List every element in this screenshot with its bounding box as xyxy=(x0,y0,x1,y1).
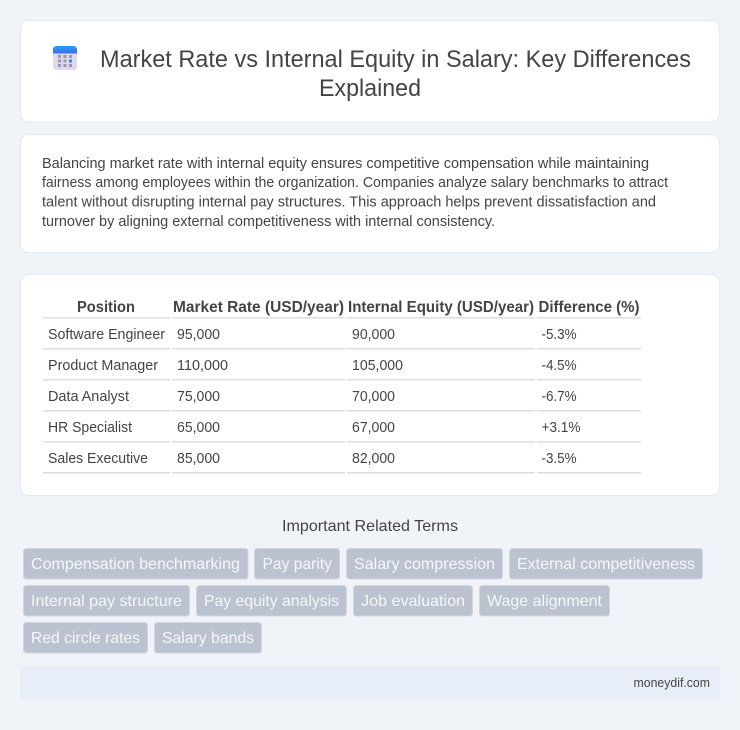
table row: Data Analyst: Data Analyst xyxy=(48,389,129,405)
table row: Sales Executive: Sales Executive xyxy=(48,451,148,467)
footer xyxy=(20,666,720,700)
tag: Pay equity analysis: Pay equity analysis xyxy=(204,593,339,610)
tag: Compensation benchmarking xyxy=(24,548,248,579)
table row: Data Analyst: 70,000 xyxy=(352,389,395,405)
tag: Internal pay structure xyxy=(24,586,190,616)
table row: HR Specialist: HR Specialist xyxy=(48,420,132,436)
text block: intro xyxy=(42,156,668,230)
table row: HR Specialist: 65,000 xyxy=(177,420,220,436)
tag group: related terms xyxy=(24,548,702,653)
tag: Pay parity: Pay parity xyxy=(262,556,332,573)
table row: Sales Executive xyxy=(48,451,577,467)
tag: Compensation benchmarking: Compensation benchmarking xyxy=(31,556,240,573)
title xyxy=(100,46,691,102)
panel: intro paragraph xyxy=(20,134,720,252)
table row: Product Manager: 110,000 xyxy=(177,358,228,374)
tag: Job evaluation: Job evaluation xyxy=(361,593,465,610)
text block: intro: Balancing market rate with internal equity ensures competitive compensation while maintaining xyxy=(42,156,649,172)
tag: Red circle rates: Red circle rates xyxy=(31,630,140,647)
table row: Software Engineer: 95,000 xyxy=(177,327,220,343)
tag: Internal pay structure: Internal pay structure xyxy=(31,593,182,610)
table row: Software Engineer: -5.3% xyxy=(542,327,577,343)
table row: Product Manager xyxy=(48,358,577,374)
title: Explained xyxy=(319,75,421,102)
text block: intro: talent without disrupting internal pay structures. This approach helps prevent dissatisfaction and xyxy=(42,194,656,210)
table row: Software Engineer xyxy=(48,327,577,343)
table row: HR Specialist: +3.1% xyxy=(542,420,581,436)
table row: HR Specialist: 67,000 xyxy=(352,420,395,436)
table row: Data Analyst: -6.7% xyxy=(542,389,577,405)
tag: Pay parity xyxy=(254,548,340,579)
tag: Pay equity analysis xyxy=(196,586,346,616)
tag: Salary compression xyxy=(346,548,502,579)
table row: Sales Executive: 82,000 xyxy=(352,451,395,467)
tag: Wage alignment: Wage alignment xyxy=(487,593,603,610)
text block: intro: turnover by aligning external competitiveness with internal consistency. xyxy=(42,214,495,230)
table row: Data Analyst: 75,000 xyxy=(177,389,220,405)
table header xyxy=(77,299,640,316)
tag: Wage alignment xyxy=(480,586,610,616)
table header: Difference (%) xyxy=(538,299,640,316)
table row: Data Analyst xyxy=(48,389,577,405)
tag: Salary compression: Salary compression xyxy=(354,556,495,573)
tag: Salary bands: Salary bands xyxy=(162,630,254,647)
title: Market Rate vs Internal Equity in Salary: Key Differences xyxy=(100,46,691,73)
table row: Sales Executive: 85,000 xyxy=(177,451,220,467)
panel: salary table xyxy=(20,274,720,496)
tag: Job evaluation xyxy=(354,586,472,616)
footer: moneydif.com xyxy=(634,676,710,690)
table row: HR Specialist xyxy=(48,420,581,436)
tag: External competitiveness xyxy=(510,548,702,579)
tag: Red circle rates xyxy=(24,622,148,653)
text block: intro: fairness among employees within the organization. Companies analyze salary benchmarks to attract xyxy=(42,175,668,191)
icon: calendar xyxy=(53,46,77,70)
table row: Sales Executive: -3.5% xyxy=(542,451,577,467)
table row: Product Manager: -4.5% xyxy=(542,358,577,374)
table header: Market Rate (USD/year) xyxy=(173,299,344,316)
panel: title card xyxy=(20,20,720,122)
table header: Internal Equity (USD/year) xyxy=(348,299,534,316)
tag: Salary bands xyxy=(154,622,262,653)
table row: Product Manager: Product Manager xyxy=(48,358,158,374)
table header: Position xyxy=(77,299,135,316)
heading: related terms: Important Related Terms xyxy=(282,518,458,535)
table row: Product Manager: 105,000 xyxy=(352,358,403,374)
table row: Software Engineer: 90,000 xyxy=(352,327,395,343)
table row: Software Engineer: Software Engineer xyxy=(48,327,165,343)
tag: External competitiveness: External competitiveness xyxy=(517,556,695,573)
